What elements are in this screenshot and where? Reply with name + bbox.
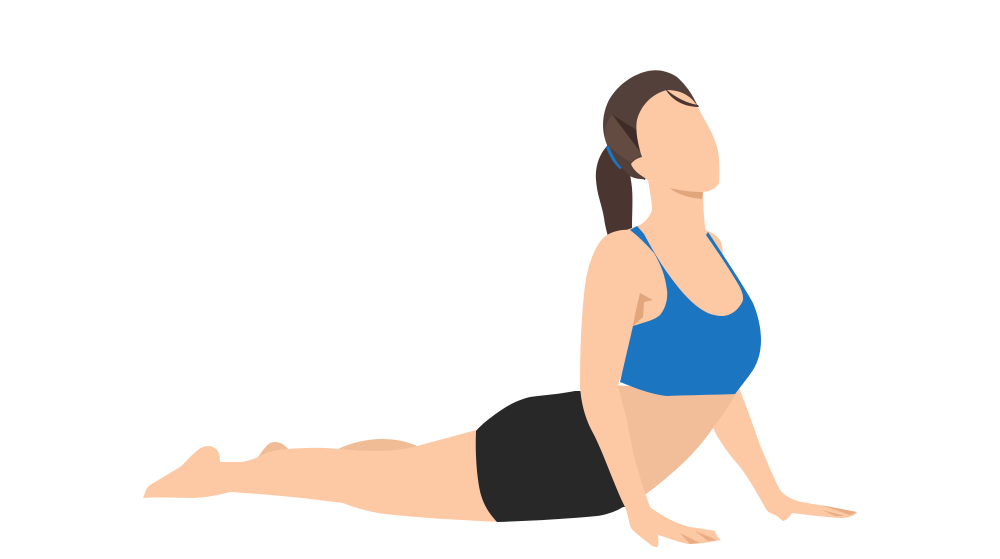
fingers near hand	[680, 531, 717, 544]
hair shadow	[613, 115, 642, 154]
neck and chest	[622, 180, 745, 335]
fingers far hand	[821, 505, 857, 516]
shorts	[476, 391, 640, 522]
far arm	[713, 388, 857, 521]
sports bra	[620, 226, 761, 396]
hair fringe strand	[666, 89, 699, 107]
hair highlight	[605, 115, 642, 162]
near arm	[580, 230, 721, 547]
jaw shadow	[670, 188, 703, 199]
face	[631, 90, 719, 192]
shaded torso	[610, 385, 737, 500]
armpit shadow	[633, 293, 653, 326]
hair	[603, 70, 698, 180]
front leg	[143, 429, 500, 522]
hair tie	[606, 146, 622, 169]
figure	[143, 70, 857, 547]
back leg and foot	[258, 439, 417, 458]
far shoulder	[705, 230, 723, 256]
hair ponytail	[596, 143, 632, 237]
